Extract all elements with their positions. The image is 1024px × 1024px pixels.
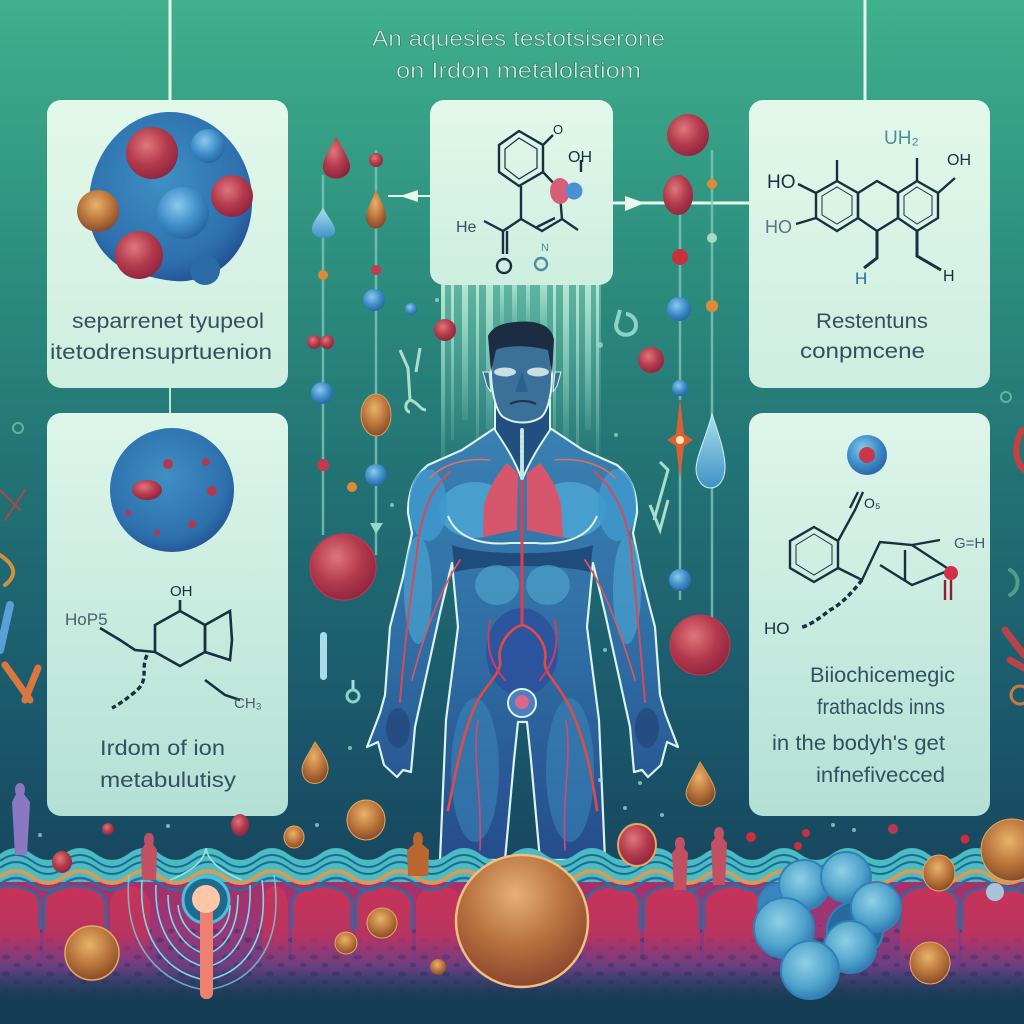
panel caption: Irdom of ion	[100, 737, 225, 760]
particles: right column	[616, 114, 730, 806]
panel caption: separrenet tyupeol	[72, 310, 264, 333]
cell arches	[0, 886, 1024, 965]
chemical structure	[764, 492, 985, 638]
chemical structure: OH	[947, 152, 971, 169]
signal rings and pin	[128, 848, 276, 999]
blood vessels	[400, 430, 645, 850]
chemical structure: O	[553, 122, 563, 137]
title: on Irdon metalolatiom	[396, 58, 641, 83]
icon: blue particle	[110, 428, 234, 552]
icon: small sphere atom	[847, 435, 887, 475]
wavy skin bands	[0, 848, 1024, 890]
red and purple tissue	[0, 882, 1024, 1007]
tissue layer	[0, 848, 1024, 1024]
muscle shading	[386, 469, 659, 842]
panel caption: conpmcene	[800, 340, 925, 363]
panel caption: Restentuns	[816, 310, 928, 333]
ambient specks	[38, 298, 856, 837]
legs and torso silhouette	[367, 428, 678, 860]
bladder	[508, 689, 536, 717]
bottom fade	[0, 965, 1024, 1007]
chemical structure	[456, 122, 592, 273]
falling rays from centre panel	[441, 270, 601, 470]
blue cell cluster	[754, 852, 901, 999]
chemical structure	[65, 583, 262, 712]
panel caption	[772, 664, 955, 787]
chemical structure: N	[541, 242, 549, 254]
bottom orange and red cells	[52, 800, 1024, 984]
chemical structure: UH₂	[884, 128, 919, 149]
large orange cell	[456, 855, 588, 987]
small human figures	[12, 783, 727, 890]
neck	[495, 400, 550, 480]
panel: lower right, biochemical	[749, 413, 990, 816]
panel caption: Biiochicemegic	[810, 664, 955, 687]
chemical structure: CH₃	[234, 695, 262, 712]
chemical structure: OH	[170, 583, 192, 600]
chemical structure: H	[943, 268, 955, 285]
panel caption: metabulutisy	[100, 769, 237, 792]
chemical structure: H	[855, 269, 867, 288]
panel: top left, cell	[47, 100, 288, 388]
panel: centre molecule	[430, 100, 613, 285]
chemical structure: O₅	[864, 495, 881, 511]
connector lines	[170, 0, 865, 1024]
panel caption	[800, 310, 928, 363]
side fragments: right edge	[1001, 392, 1024, 704]
side fragments: left edge	[0, 423, 38, 700]
arch outlines	[0, 886, 1024, 930]
panel caption	[50, 310, 272, 364]
panel caption: itetodrensuprtuenion	[50, 341, 272, 364]
head	[483, 321, 561, 422]
lungs	[483, 463, 563, 538]
panel caption: in the bodyh's get	[772, 732, 945, 755]
chemical structure: He	[456, 219, 477, 236]
chemical structure	[765, 128, 971, 288]
chemical structure: HO	[765, 217, 792, 237]
chemical structure: OH	[568, 149, 592, 166]
title	[372, 26, 665, 83]
title: An aquesies testotsiserone	[372, 26, 665, 51]
chemical structure: HO	[767, 172, 796, 193]
panel caption: infnefivecced	[816, 764, 945, 787]
icon: blue cell with spheres	[77, 112, 253, 285]
panel caption: frathacIds inns	[817, 696, 945, 719]
panel: lower left, iron metabolism	[47, 413, 288, 816]
particles: left column	[302, 137, 456, 784]
panel caption	[100, 737, 237, 792]
vertical pathway lines	[323, 150, 712, 620]
chemical structure: G=H	[954, 535, 985, 552]
panel: top right, compound	[749, 100, 990, 388]
chemical structure: HoP5	[65, 610, 108, 629]
human figure	[367, 321, 678, 860]
chemical structure: HO	[764, 619, 790, 638]
